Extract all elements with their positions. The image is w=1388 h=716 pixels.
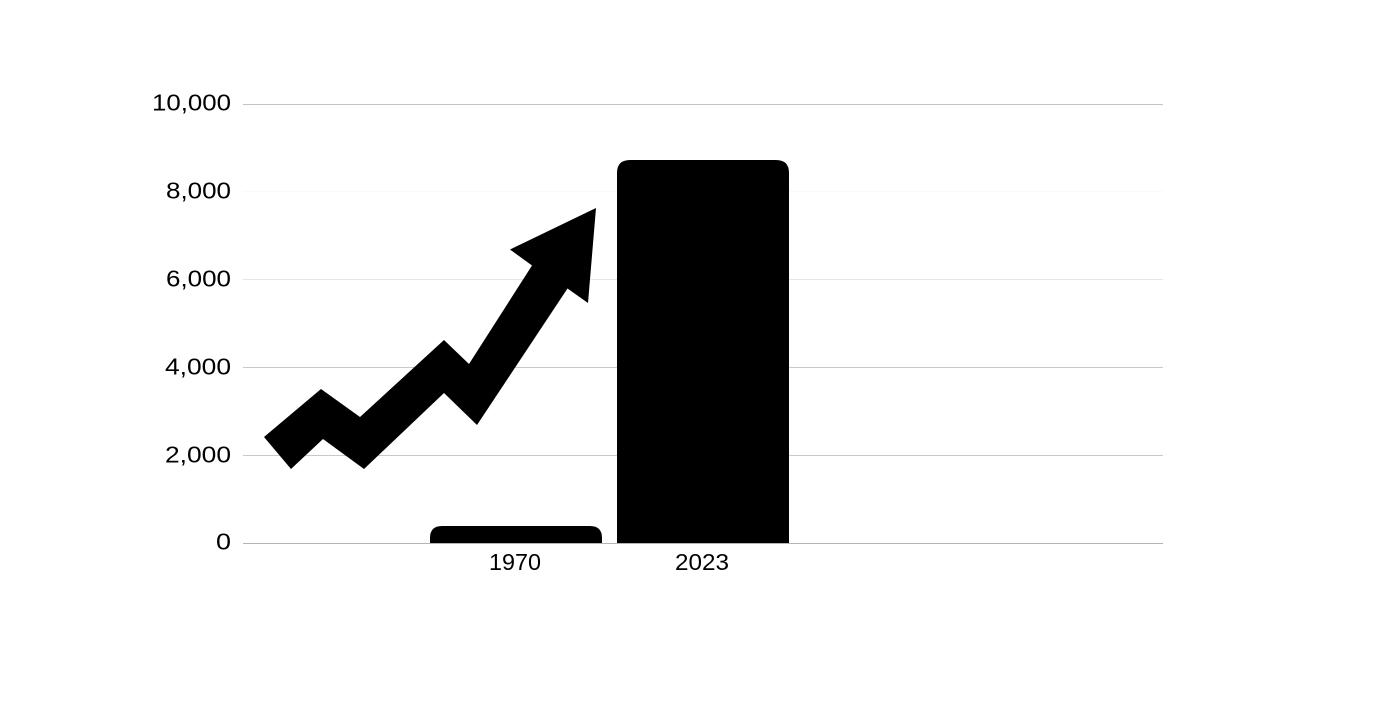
x axis labels: 1970 — [489, 549, 541, 575]
x axis labels — [489, 549, 729, 575]
y axis labels — [152, 90, 231, 554]
y axis labels: 8,000 — [166, 178, 231, 204]
x axis labels: 2023 — [675, 549, 729, 575]
y axis labels: 0 — [216, 528, 231, 554]
bar: 1970 — [430, 526, 602, 543]
icon: rising zigzag arrow — [264, 208, 596, 469]
y axis labels: 10,000 — [152, 90, 231, 116]
bar: 2023 — [617, 160, 789, 543]
y axis labels: 6,000 — [166, 266, 231, 292]
y axis labels: 4,000 — [165, 354, 231, 380]
y axis labels: 2,000 — [165, 442, 231, 468]
